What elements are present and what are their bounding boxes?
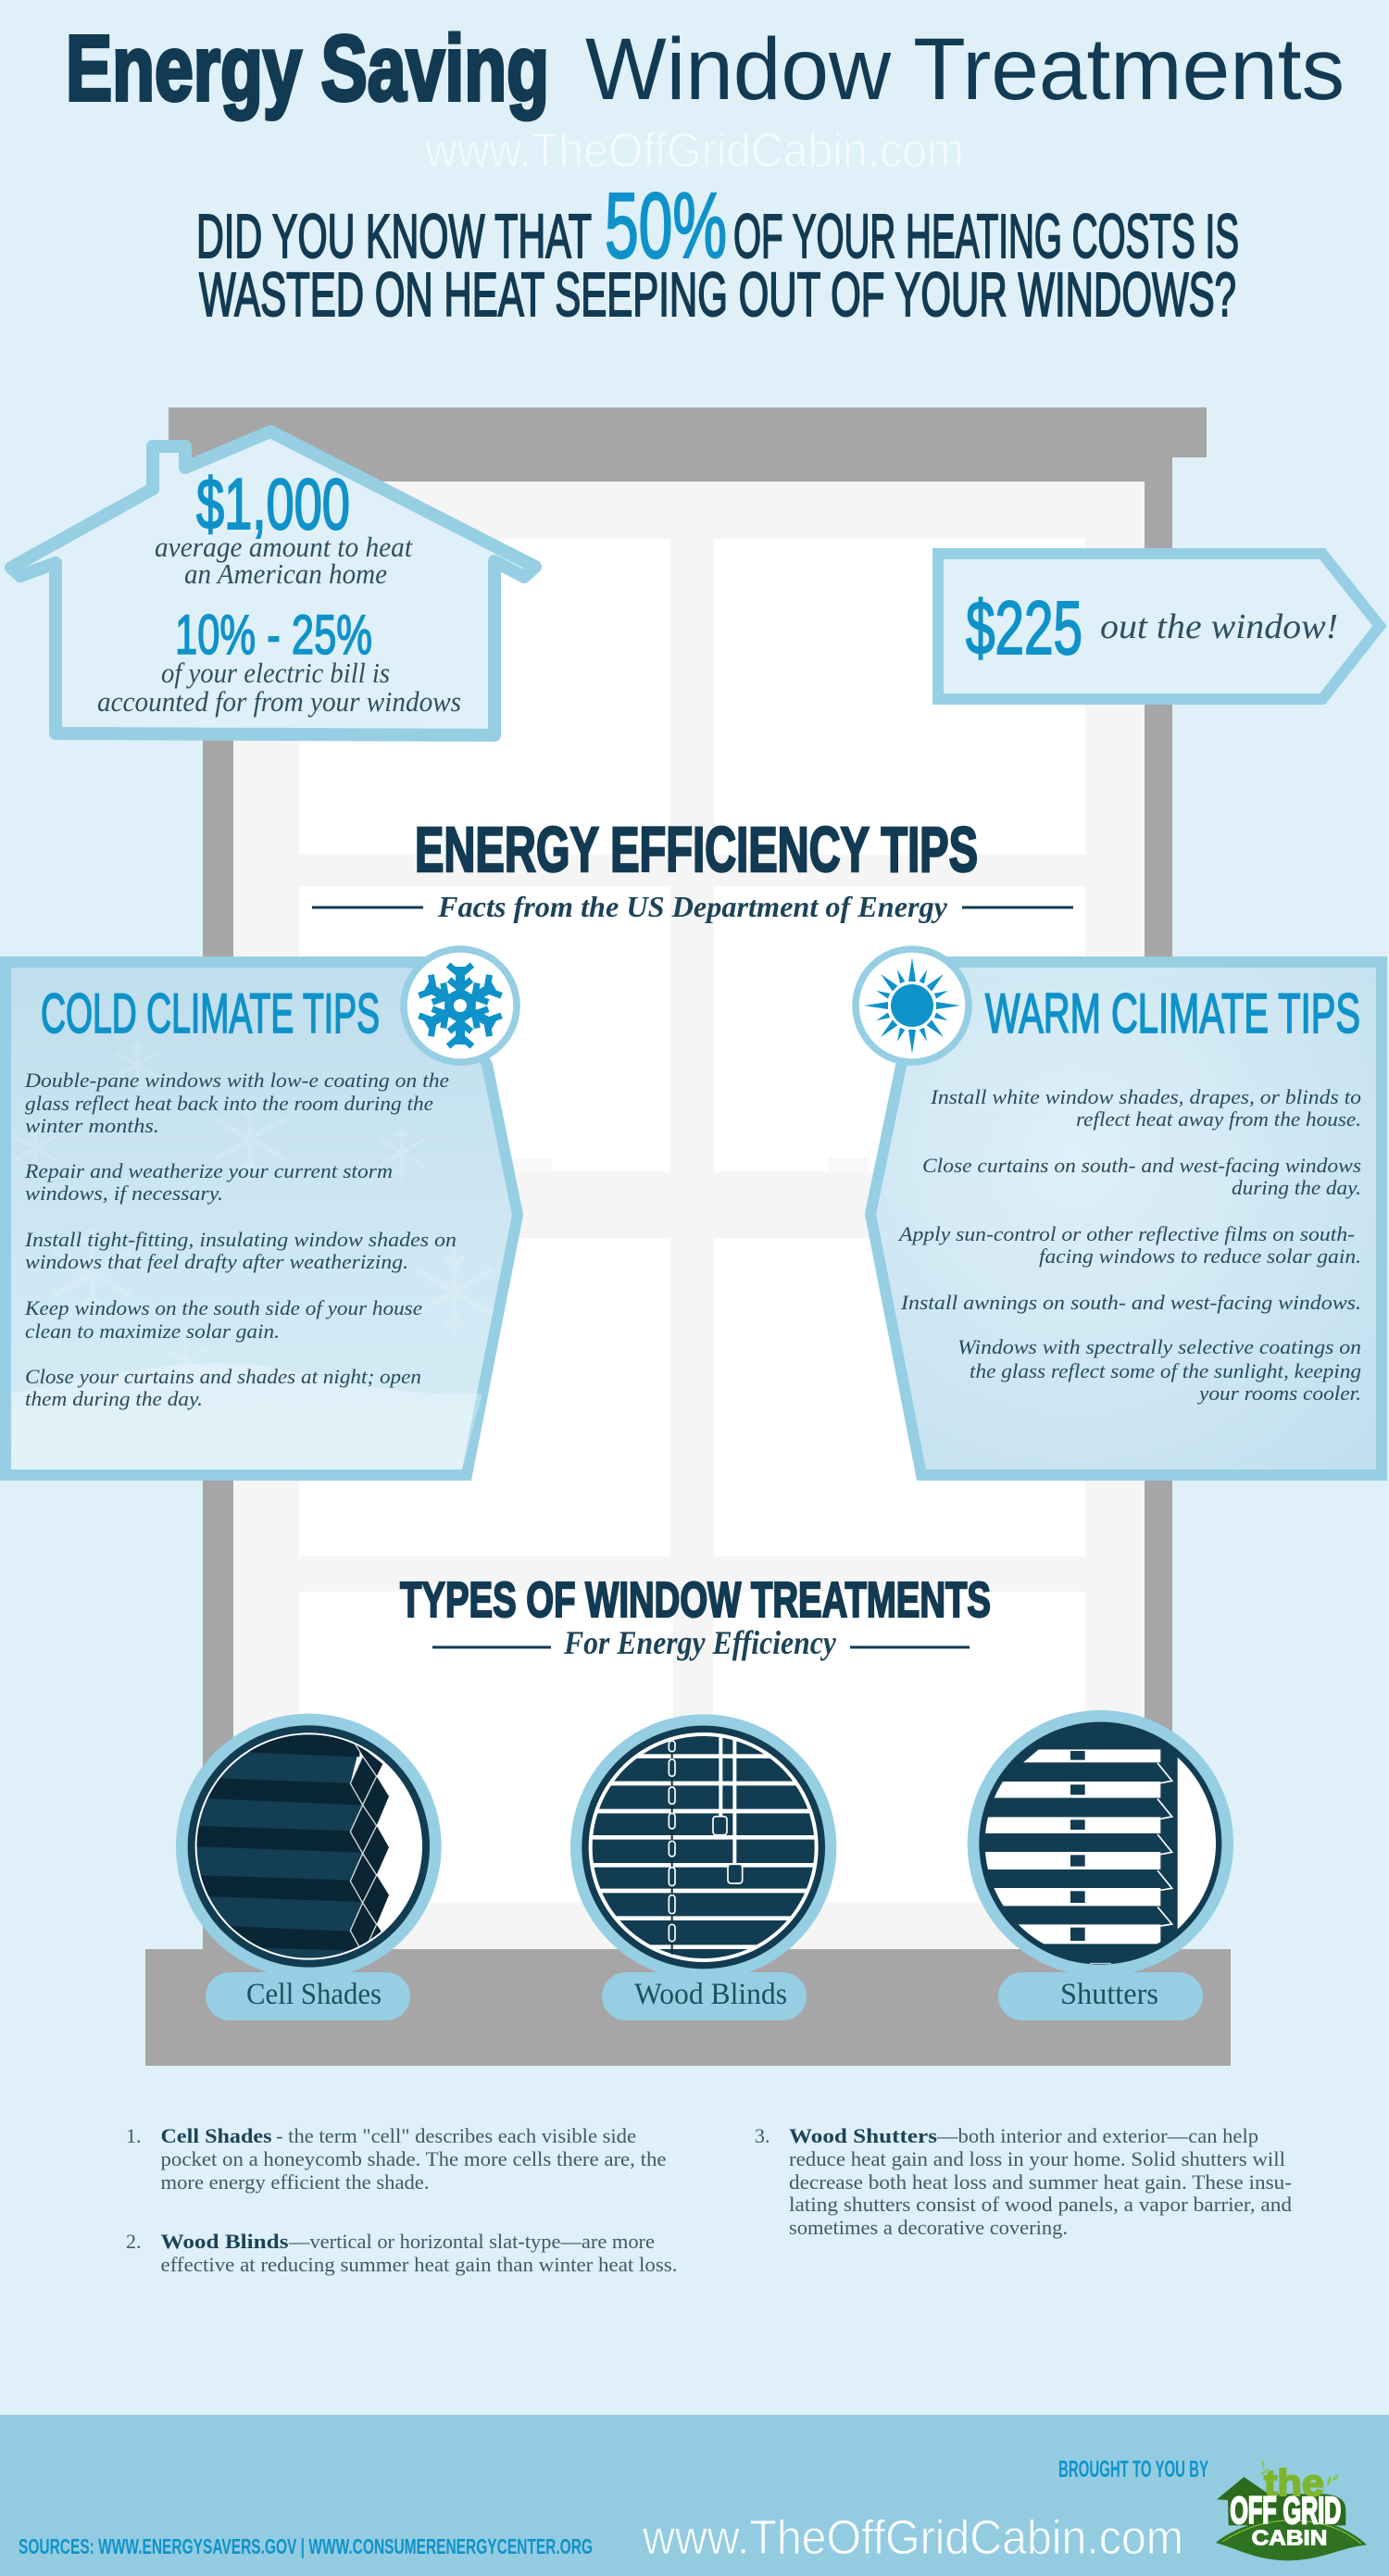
text: cold tips: Keep windows on the south side of your house (24, 1296, 422, 1319)
text: treatments list right column: lating shutters consist of wood panels, a vapor barrier, and (789, 2193, 1292, 2216)
text: average amount: an American home (184, 557, 387, 590)
text: electric bill (97, 657, 461, 718)
title: Window Treatments (585, 20, 1345, 119)
icon: snowflake (404, 949, 517, 1062)
text: cold tips: Close your curtains and shades at night; open (25, 1365, 421, 1388)
text: cold tips: windows, if necessary. (25, 1182, 223, 1205)
stat: 10% - 25%: 10% - 25% (175, 604, 372, 666)
text: brought to you by: BROUGHT TO YOU BY (1058, 2457, 1208, 2482)
text: treatments list right column: Wood Shutters (789, 2124, 937, 2147)
text: warm tips: your rooms cooler. (1197, 1382, 1361, 1405)
text: out the window: out the window! (1100, 607, 1338, 646)
text: cold tips (24, 1069, 457, 1410)
label: shutters (998, 1972, 1203, 2020)
stat: $1,000: $1,000 (196, 463, 350, 544)
text: warm tips: reflect heat away from the house. (1076, 1107, 1361, 1131)
text: treatments list left column: 2. (126, 2230, 141, 2253)
text: treatments list left column: Wood Blinds (161, 2230, 289, 2253)
heading: cold climate tips: COLD CLIMATE TIPS (41, 982, 380, 1044)
logo: the off grid cabin (1216, 2460, 1367, 2560)
text: treatments list left column: pocket on a honeycomb shade. The more cells there are, the (161, 2147, 667, 2170)
text: treatments list right column: decrease both heat loss and summer heat gain. These insu- (789, 2170, 1292, 2194)
did you know headline: 50% (605, 174, 727, 278)
text: cold tips: winter months. (25, 1114, 159, 1137)
logo: the off grid cabin: CABIN (1252, 2525, 1327, 2549)
label: shutters: Shutters (1060, 1978, 1158, 2011)
cold panel shape (6, 962, 518, 1475)
logo: the off grid cabin: the (1264, 2463, 1324, 2504)
text: warm tips: Windows with spectrally selective coatings on (957, 1335, 1361, 1358)
text: warm tips: facing windows to reduce solar gain. (1039, 1244, 1361, 1268)
text: cold tips: windows that feel drafty after weatherizing. (25, 1250, 408, 1273)
text: warm tips: Close curtains on south- and west-facing windows (922, 1154, 1361, 1177)
text: treatments list left column (126, 2124, 678, 2276)
text: cold tips: glass reflect heat back into the room during the (25, 1092, 433, 1115)
text: warm tips: during the day. (1232, 1176, 1361, 1199)
house outline (11, 431, 535, 735)
panel: warm climate tips (856, 949, 1382, 1475)
text: treatments list right column (755, 2124, 1292, 2239)
website watermark top: www.TheOffGridCabin.com (424, 124, 964, 178)
icon: cell shades (176, 1714, 442, 1979)
text: warm tips: Install white window shades, drapes, or blinds to (930, 1085, 1361, 1108)
did you know headline: DID YOU KNOW THAT (196, 202, 592, 271)
website footer: www.TheOffGridCabin.com (642, 2511, 1183, 2565)
text: cold tips: them during the day. (25, 1387, 203, 1410)
text: cold tips: Install tight-fitting, insulating window shades on (24, 1228, 457, 1251)
stat: $225: $225 (966, 586, 1082, 670)
panel: cold climate tips (6, 949, 518, 1475)
text: sources: SOURCES: WWW.ENERGYSAVERS.GOV | WWW.CONSUMERENERGYCENTER.ORG (19, 2534, 593, 2558)
text: treatments list right column: reduce heat gain and loss in your home. Solid shutters will (789, 2147, 1285, 2170)
heading: energy efficiency tips: ENERGY EFFICIENCY TIPS (415, 814, 978, 885)
text: treatments list right column: 3. (755, 2124, 770, 2147)
heading: types of window treatments: For Energy Efficiency (563, 1624, 837, 1661)
text: treatments list right column: sometimes a decorative covering. (789, 2216, 1068, 2239)
label: wood blinds: Wood Blinds (634, 1978, 787, 2011)
text: warm tips: Install awnings on south- and west-facing windows. (900, 1291, 1361, 1314)
text: warm tips (897, 1085, 1361, 1405)
icon: shutters (968, 1710, 1233, 1976)
arrow shape (938, 554, 1380, 699)
text: electric bill: of your electric bill is (161, 657, 390, 689)
label: cell shades (206, 1972, 410, 2020)
panel: house stats (11, 431, 535, 735)
text: warm tips: Apply sun-control or other reflective films on south- (897, 1222, 1355, 1245)
panel: $225 arrow callout (938, 554, 1380, 699)
label: wood blinds (602, 1972, 807, 2020)
text: average amount (155, 531, 413, 590)
text: treatments list left column: 1. (126, 2124, 141, 2147)
heading: energy efficiency tips (312, 814, 1073, 923)
text: treatments list left column: - the term "cell" describes each visible side (276, 2124, 636, 2147)
label: cell shades: Cell Shades (246, 1978, 382, 2011)
heading: types of window treatments: TYPES OF WINDOW TREATMENTS (400, 1572, 991, 1628)
text: treatments list left column: Cell Shades (161, 2124, 272, 2147)
text: treatments list left column: —vertical or horizontal slat-type—are more (288, 2230, 655, 2253)
snow background (11, 1041, 493, 1469)
text: cold tips: Double-pane windows with low-e coating on the (24, 1069, 449, 1092)
text: treatments list left column: effective at reducing summer heat gain than winter heat loss. (161, 2253, 678, 2276)
footer band (0, 2415, 1389, 2576)
text: cold tips: Repair and weatherize your current storm (24, 1159, 393, 1182)
heading: types of window treatments (400, 1572, 991, 1661)
text: cold tips: clean to maximize solar gain. (25, 1319, 280, 1343)
text: treatments list right column: —both interior and exterior—can help (936, 2124, 1258, 2147)
warm panel shape (870, 962, 1382, 1475)
icon: sun (856, 949, 969, 1062)
icon: wood blinds (570, 1714, 836, 1981)
title: Energy Saving (66, 17, 549, 120)
did you know headline (196, 174, 1239, 330)
window illustration (145, 407, 1231, 2066)
text: treatments list left column: more energy efficient the shade. (161, 2170, 430, 2194)
text: electric bill: accounted for from your windows (97, 685, 461, 718)
text: warm tips: the glass reflect some of the sunlight, keeping (970, 1359, 1361, 1382)
title (66, 17, 1345, 120)
text: average amount: average amount to heat (155, 531, 413, 563)
heading: energy efficiency tips: Facts from the US Department of Energy (437, 890, 948, 923)
